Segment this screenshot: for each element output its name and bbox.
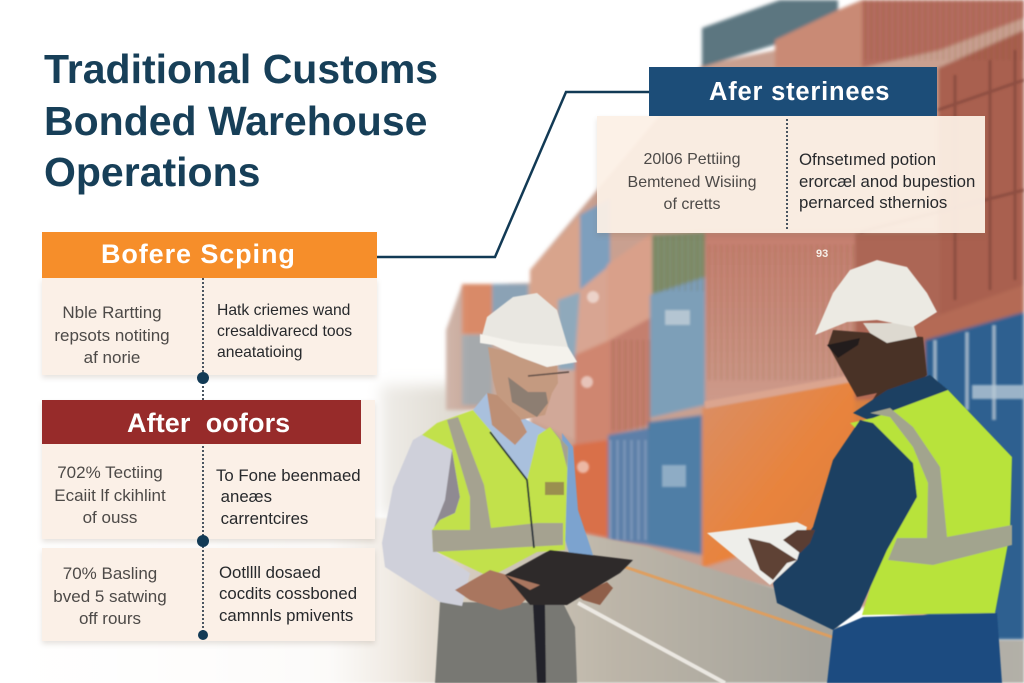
right text: cresaldivarecd toos (217, 323, 352, 340)
heading: after sterinees (649, 67, 937, 116)
panel: after sterinees (596, 67, 985, 237)
timeline with dots (197, 278, 209, 640)
hands (455, 570, 540, 610)
right text: Ofnsetımed potion (799, 150, 936, 169)
right text: erorcæl anod bupestion (799, 172, 975, 191)
tablet (505, 550, 633, 605)
left text: af norie (84, 348, 140, 367)
left text row 2: 70% Basling (63, 564, 157, 583)
right text (217, 302, 352, 361)
hard hat (863, 323, 917, 343)
dot 1 (197, 372, 209, 384)
heading: before scoping (42, 232, 377, 278)
left text row 2: off rours (79, 609, 141, 628)
left text: 20l06 Pettiing (644, 151, 740, 168)
title: Bonded Warehouse (44, 98, 427, 144)
title (44, 46, 438, 195)
hi-vis vest (850, 390, 1012, 615)
paper (707, 522, 807, 585)
left inspector (382, 293, 633, 683)
divider (786, 119, 788, 229)
sleeve (773, 420, 917, 630)
container detail (577, 0, 1024, 540)
shirt sleeves (382, 427, 470, 606)
right text row 2 (219, 563, 357, 625)
head and neck (828, 330, 927, 417)
panel: before scoping (40, 232, 378, 380)
heading: after sterinees: Afer sterinees (709, 78, 890, 106)
left text (54, 303, 170, 367)
card: after sterinees body (597, 116, 985, 233)
card backdrop: after oofors (42, 400, 375, 539)
right text: aneatatioing (217, 344, 302, 361)
title: Traditional Customs (44, 46, 438, 92)
dot 3 (198, 630, 208, 640)
left text row 1: 702% Tectiing (57, 463, 163, 482)
distant building (380, 385, 470, 515)
left text: Nble Rartting (62, 303, 162, 322)
left text row 1 (54, 463, 166, 527)
shirt collar (473, 393, 547, 480)
card: before scoping body (42, 278, 377, 375)
right text row 1 (216, 466, 361, 528)
left text (628, 151, 756, 213)
reflective strips (870, 408, 1012, 565)
collar (853, 375, 948, 422)
lower jacket (827, 613, 1002, 683)
hi-vis vest (422, 410, 568, 577)
right text row 1: To Fone beenmaed (216, 466, 361, 485)
right text row 1: carrentcires (221, 509, 308, 528)
left text: repsots notiting (54, 326, 170, 345)
left text row 2 (53, 564, 167, 628)
panel: after oofors (40, 400, 376, 646)
road lines (625, 567, 835, 638)
left text row 2: bved 5 satwing (53, 587, 167, 606)
heading: before scoping: Bofere Scping (101, 239, 296, 269)
right text row 2: cocdits cossboned (219, 584, 357, 603)
right text: Hatk criemes wand (217, 302, 350, 319)
glasses (827, 338, 860, 358)
hard hat (480, 293, 577, 367)
connector arrow: before panel to after panel (377, 90, 649, 258)
dot 2 (197, 535, 209, 547)
container stacks (446, 0, 1024, 640)
head (488, 347, 558, 420)
right text row 1: aneæs (221, 487, 272, 506)
title: Operations (44, 149, 260, 195)
right text (799, 150, 975, 212)
left text: Bemtened Wisiing (628, 174, 756, 191)
heading: after oofors: After oofors (127, 408, 290, 438)
left text: of cretts (664, 196, 720, 213)
small number: 93 (816, 248, 828, 260)
ground (0, 518, 1024, 683)
left white fade (0, 0, 470, 683)
card: row 2 (42, 548, 375, 641)
hands (748, 538, 797, 580)
trousers (435, 602, 577, 683)
left text row 1: of ouss (83, 508, 137, 527)
right text row 2: Ootllll dosaed (219, 563, 321, 582)
right text: pernarced sthernios (799, 193, 947, 212)
heading: after oofors (42, 400, 361, 444)
right inspector (707, 260, 1012, 683)
right text row 2: camnnls pmivents (219, 606, 353, 625)
left text row 1: Ecaiit lf ckihlint (54, 486, 166, 505)
